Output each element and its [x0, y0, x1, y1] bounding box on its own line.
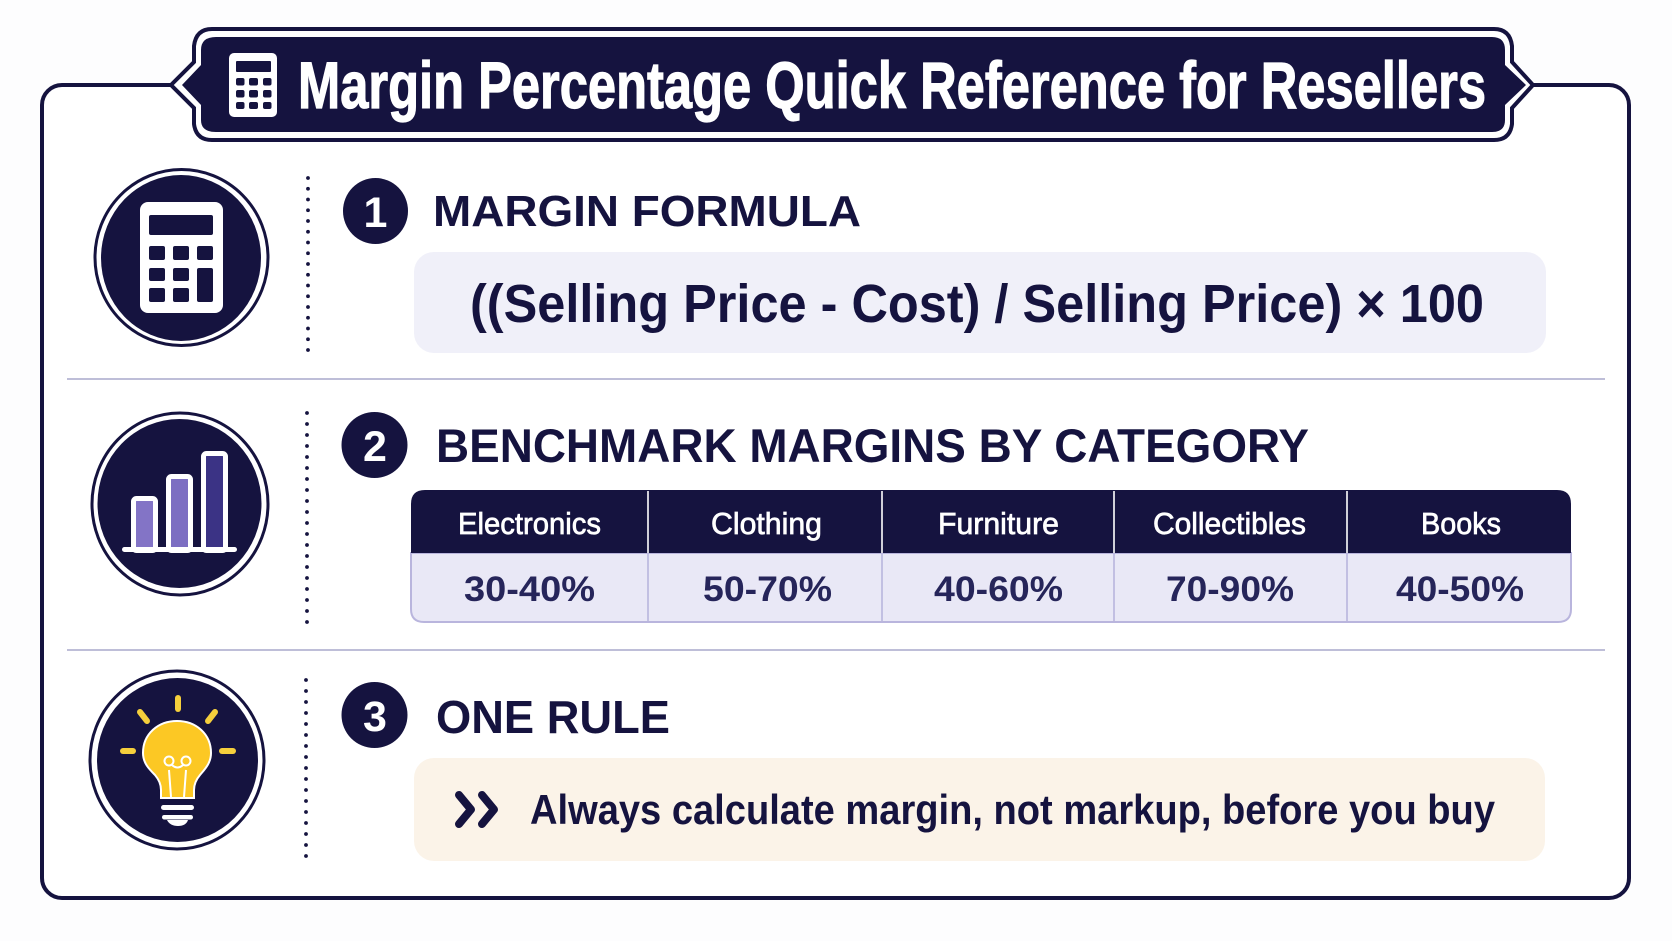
- icon: light bulb badge: [90, 671, 264, 849]
- table headers: Furniture: [938, 506, 1059, 541]
- table values: 70-90%: [1166, 570, 1294, 609]
- heading: benchmark margins by category: BENCHMARK MARGINS BY CATEGORY: [436, 419, 1309, 472]
- table headers: Electronics: [458, 506, 601, 541]
- table headers: Collectibles: [1153, 506, 1306, 541]
- number badge 2: [342, 412, 408, 478]
- icon: title calculator: [229, 53, 277, 117]
- icon: bar chart badge: [92, 413, 268, 595]
- section 1: margin formula: [343, 178, 1546, 353]
- table values: 30-40%: [464, 570, 595, 609]
- rule text: Always calculate margin, not markup, before you buy: [530, 786, 1496, 833]
- section 2: benchmark margins: [342, 412, 1571, 622]
- title banner: [171, 29, 1533, 140]
- table values: 40-60%: [934, 570, 1063, 609]
- table values: [464, 570, 1524, 609]
- heading: margin formula: MARGIN FORMULA: [433, 187, 861, 236]
- icon: double chevron: [459, 795, 494, 824]
- formula box: [414, 252, 1546, 353]
- number badge 1: [343, 178, 408, 244]
- table headers: [458, 506, 1501, 541]
- table of margins: [411, 490, 1571, 622]
- table values: 40-50%: [1396, 570, 1524, 609]
- icon: calculator badge: [95, 170, 268, 346]
- number badge 3: [342, 682, 408, 748]
- table headers: Clothing: [711, 506, 822, 541]
- table headers: Books: [1421, 506, 1501, 541]
- number badge 2: 2: [363, 423, 387, 471]
- rule callout: [414, 758, 1545, 861]
- table values: 50-70%: [703, 570, 832, 609]
- number badge 3: 3: [363, 693, 387, 741]
- section 3: one rule: [342, 682, 1545, 861]
- heading: one rule: ONE RULE: [436, 691, 670, 743]
- number badge 1: 1: [364, 189, 387, 237]
- formula box: ((Selling Price - Cost) / Selling Price) × 100: [470, 274, 1484, 334]
- bulb rays: [123, 698, 233, 751]
